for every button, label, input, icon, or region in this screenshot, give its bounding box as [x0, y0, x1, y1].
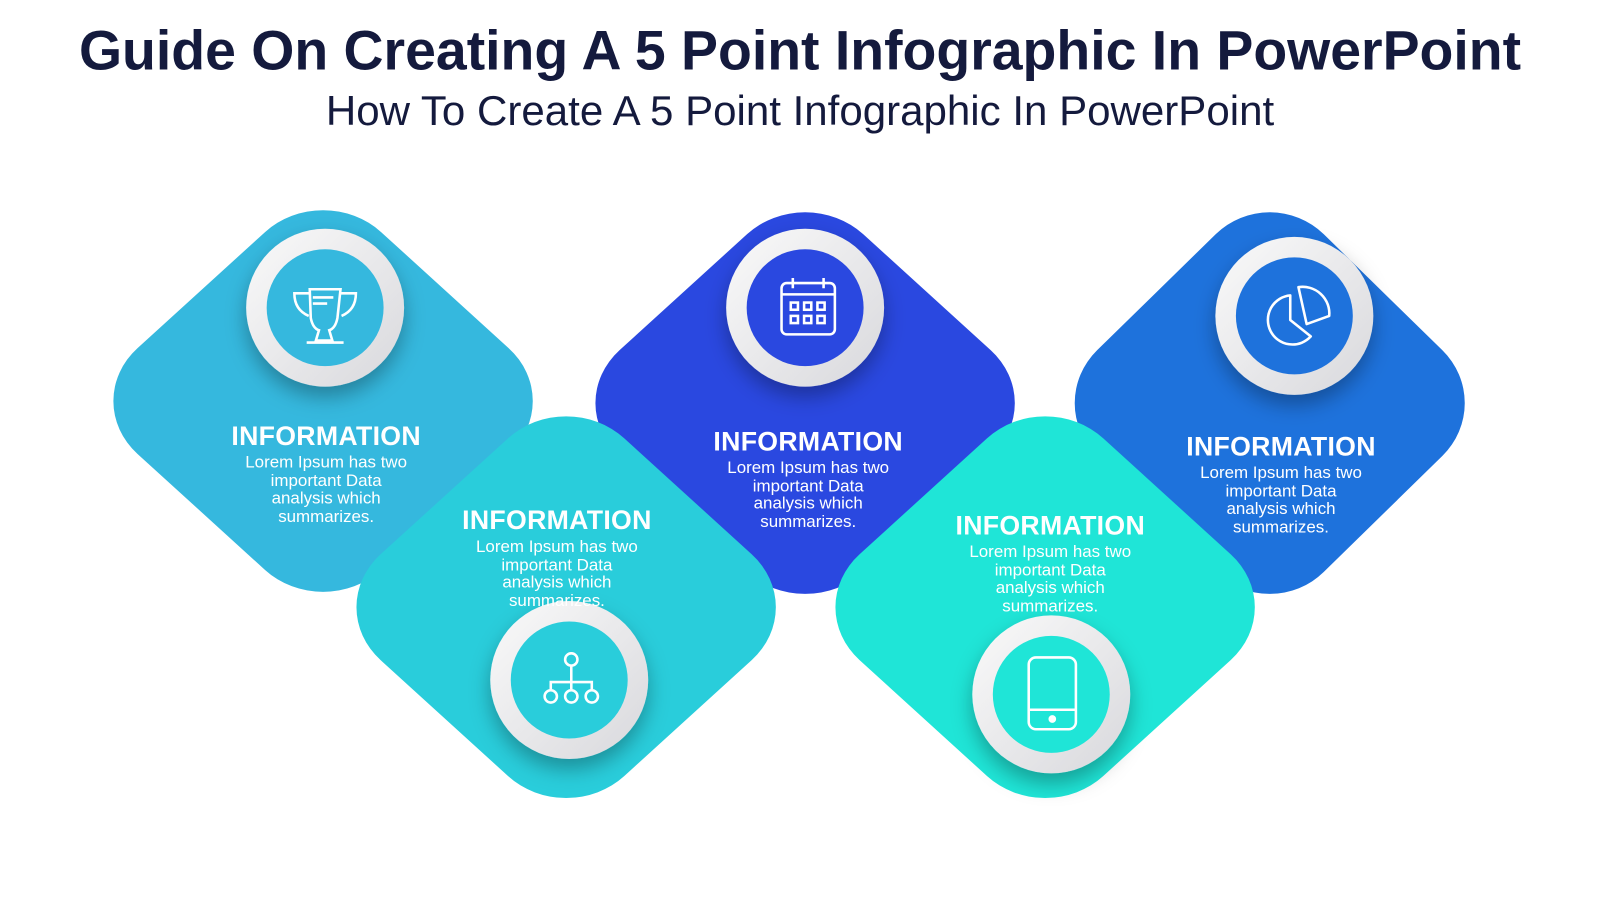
- text: panel 5: important Data: [1226, 482, 1337, 500]
- text: panel 2: summarizes.: [509, 591, 605, 610]
- icon: phone: [972, 615, 1130, 773]
- subtitle: How To Create A 5 Point Infographic In PowerPoint: [326, 87, 1274, 134]
- icon: trophy: [246, 229, 404, 387]
- text: panel 1: analysis which: [272, 489, 381, 508]
- text: panel 4: INFORMATION: [955, 510, 1145, 541]
- icon: calendar: [726, 229, 884, 387]
- title: Guide On Creating A 5 Point Infographic In PowerPoint: [79, 21, 1521, 82]
- text: panel 1: INFORMATION: [231, 421, 421, 451]
- text: panel 1: [231, 421, 421, 526]
- text: panel 4: analysis which: [996, 578, 1105, 597]
- text: panel 3: INFORMATION: [713, 426, 903, 456]
- text: panel 4: Lorem Ipsum has two: [969, 543, 1131, 561]
- text: panel 4: summarizes.: [1002, 596, 1098, 615]
- icon: pie chart: [1215, 237, 1373, 395]
- text: panel 4: [955, 510, 1145, 615]
- panel: diamond 4: [801, 385, 1289, 829]
- text: panel 1: Lorem Ipsum has two: [245, 453, 407, 472]
- text: panel 2: analysis which: [502, 573, 611, 592]
- text: panel 4: important Data: [995, 561, 1106, 579]
- text: panel 5: summarizes.: [1233, 517, 1329, 536]
- text: panel 3: Lorem Ipsum has two: [727, 458, 889, 477]
- text: panel 3: important Data: [753, 476, 864, 495]
- text: panel 3: [713, 426, 903, 531]
- text: panel 5: INFORMATION: [1186, 431, 1376, 462]
- text: panel 3: analysis which: [754, 494, 863, 513]
- text: panel 2: INFORMATION: [462, 505, 652, 535]
- text: panel 3: summarizes.: [760, 512, 856, 531]
- text: panel 5: [1186, 431, 1376, 536]
- text: panel 1: important Data: [271, 471, 382, 490]
- text: panel 2: important Data: [501, 555, 612, 574]
- text: panel 5: analysis which: [1226, 499, 1336, 518]
- text: panel 1: summarizes.: [278, 507, 374, 526]
- text: panel 2: [462, 505, 652, 610]
- panel: diamond 2: [322, 385, 810, 829]
- text: panel 2: Lorem Ipsum has two: [476, 537, 638, 556]
- panel: diamond 1: [79, 179, 567, 623]
- text: panel 5: Lorem Ipsum has two: [1200, 464, 1362, 482]
- panel: diamond 5: [1043, 181, 1496, 625]
- panel: diamond 3: [561, 181, 1049, 625]
- icon: hierarchy: [490, 601, 648, 759]
